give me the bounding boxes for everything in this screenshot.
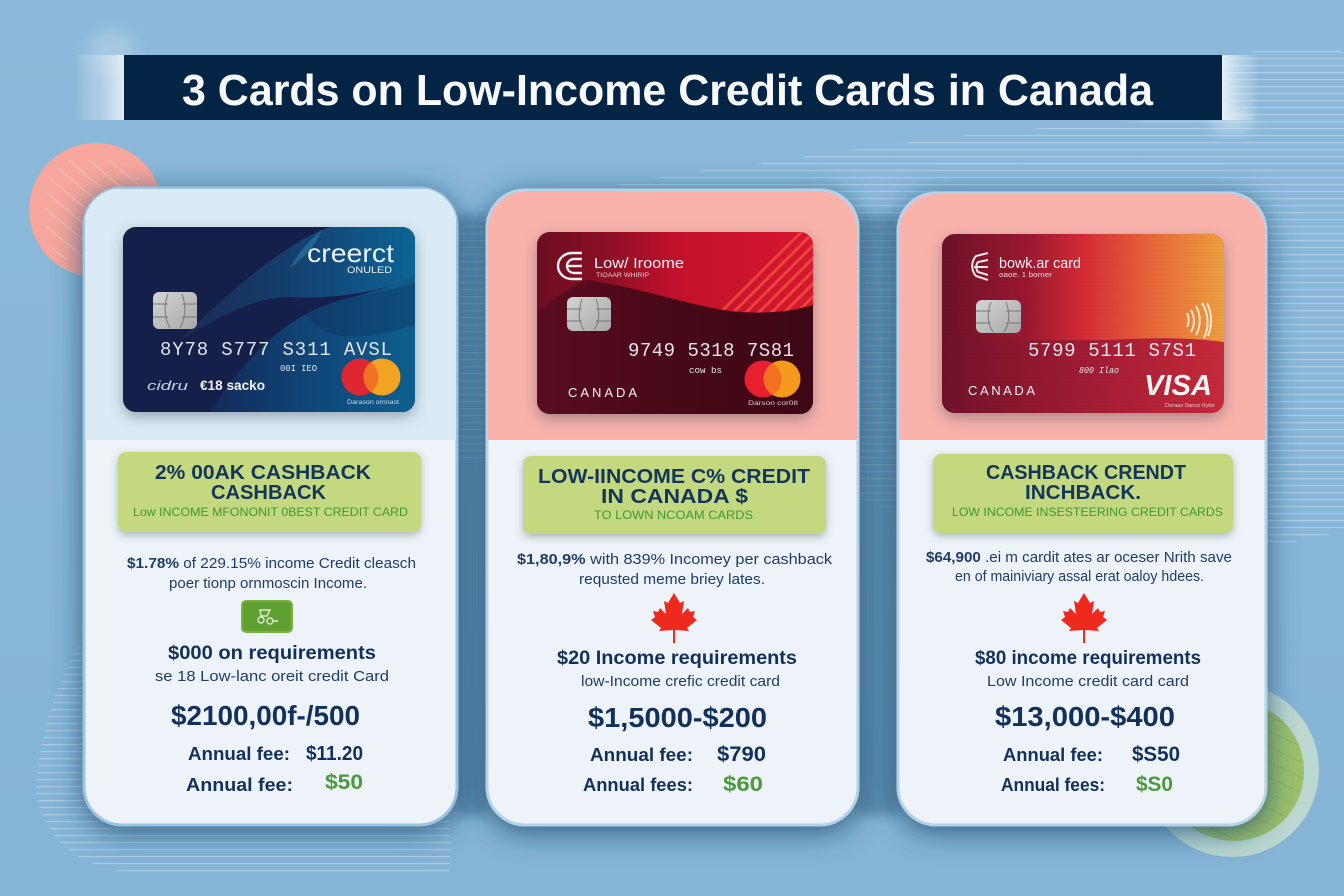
card number: 5799 5111 S7S1	[1028, 340, 1196, 362]
requirements 1: se 18 Low-lanc oreit credit Card	[155, 668, 389, 685]
credit card 1: 00I IEO	[280, 364, 317, 374]
requirements 3	[975, 648, 1201, 690]
green box 1: Low INCOME MFONONIT 0BEST CREDIT CARD	[133, 505, 408, 519]
requirements 2	[557, 648, 797, 690]
fees 3	[1001, 743, 1180, 796]
chip	[976, 300, 1021, 333]
gap shading between panels	[455, 215, 900, 815]
panel header 2	[488, 191, 857, 440]
green box 3	[933, 454, 1233, 533]
requirements 3: Low Income credit card card	[987, 673, 1189, 690]
decorative green circle	[1145, 683, 1319, 857]
panel header 3	[899, 194, 1265, 440]
description 1: poer tionp ornmoscin Income.	[169, 575, 367, 592]
fees 1: Annual fee:	[188, 744, 290, 764]
credit limit 1: $2100,00f-/500	[171, 700, 360, 731]
green box 2	[523, 456, 826, 534]
description 3	[926, 549, 1232, 585]
fees 2: $60	[723, 773, 763, 796]
chip	[153, 292, 197, 329]
fees 2: Annual fee:	[590, 745, 693, 765]
mastercard logo	[744, 360, 800, 398]
icon: green cash note	[242, 601, 292, 632]
fees 2	[583, 743, 766, 796]
credit card 3: 800 Ilao	[1079, 366, 1119, 376]
credit card 2: Darson cor08	[748, 401, 799, 407]
green box 2: IN CANADA $	[601, 486, 748, 508]
background stripes: upper right	[450, 48, 1344, 545]
card number: 9749 5318 7S81	[628, 340, 794, 362]
credit card 1	[123, 227, 415, 412]
credit card 2: TIOAAR WHIRIP	[596, 273, 649, 279]
green box 3: LOW INCOME INSESTEERING CREDIT CARDS	[952, 505, 1223, 519]
panel header 1	[85, 189, 456, 440]
fees 3: Annual fees:	[1001, 775, 1105, 795]
requirements 3: $80 income requirements	[975, 648, 1201, 669]
credit card 3	[942, 234, 1224, 413]
green box 1: 2% 00AK CASHBACK	[155, 462, 372, 484]
fees 1	[186, 743, 363, 795]
brand: creerct	[307, 238, 395, 268]
panel: card 3	[898, 193, 1266, 825]
panel: card 2	[487, 190, 858, 825]
green box 1	[118, 452, 421, 532]
credit card 3: oaoe. 1 borner	[999, 272, 1053, 279]
description 2	[517, 551, 833, 588]
title glow right	[1210, 55, 1258, 132]
green box 3: INCHBACK.	[1025, 482, 1141, 504]
decorative pink circle	[29, 143, 163, 277]
description 3: en of mainiviary assal erat oaloy hdees.	[955, 568, 1204, 585]
fees 3: $S50	[1132, 743, 1180, 766]
description 1	[127, 555, 416, 592]
visa logo: VISA	[1144, 370, 1212, 402]
requirements 2: $20 Income requirements	[557, 648, 797, 669]
card number: 8Y78 S777 S311 AVSL	[160, 339, 392, 361]
green box 1: CASHBACK	[211, 482, 327, 504]
fees 3: $S0	[1136, 773, 1173, 796]
green box 2: LOW-IINCOME C% CREDIT	[538, 466, 810, 488]
fees 2: $790	[717, 743, 766, 766]
fees 1: $11.20	[306, 743, 363, 765]
credit card 3: Dsraas 0ance 0ytor	[1165, 403, 1215, 409]
credit card 1: Darason omnast	[347, 400, 399, 406]
logo	[558, 253, 582, 279]
icon: maple leaf	[651, 593, 697, 643]
credit card 2	[537, 232, 813, 414]
credit card 1: ONULED	[347, 265, 393, 275]
brand: Low/ Iroome	[594, 255, 684, 272]
credit limit 2: $1,5000-$200	[588, 702, 767, 733]
description 1: $1.78% of 229.15% income Credit cleasch	[127, 555, 416, 572]
requirements 2: low-Income crefic credit card	[581, 673, 780, 690]
fees 3: Annual fee:	[1003, 745, 1103, 765]
credit card 2: cow bs	[689, 366, 722, 376]
green box 2: TO LOWN NCOAM CARDS	[594, 508, 753, 522]
contactless icon	[1187, 303, 1211, 338]
chip	[567, 297, 611, 331]
fees 1: Annual fee:	[186, 775, 293, 795]
requirements 1	[155, 643, 389, 685]
description 3: $64,900 .ei m cardit ates ar oceser Nrith save	[926, 549, 1232, 566]
icon: maple leaf	[1061, 593, 1107, 643]
requirements 1: $000 on requirements	[168, 643, 376, 664]
title glow left	[74, 30, 136, 120]
title bar	[124, 55, 1222, 120]
credit limit 3: $13,000-$400	[995, 701, 1175, 732]
title: 3 Cards on Low-Income Credit Cards in Canada	[182, 66, 1154, 115]
credit card 1: cidru	[147, 378, 188, 393]
description 2: $1,80,9% with 839% Incomey per cashback	[517, 551, 833, 568]
credit card 3: CANADA	[968, 383, 1035, 398]
fees 1: $50	[325, 771, 363, 794]
credit card 1: €18 sacko	[200, 377, 265, 393]
green box 3: CASHBACK CRENDT	[986, 462, 1186, 484]
logo	[972, 253, 988, 280]
panel: card 1	[84, 188, 457, 825]
background stripes: lower left	[36, 640, 450, 873]
description 2: requsted meme briey lates.	[579, 571, 765, 588]
mastercard logo	[342, 358, 400, 396]
brand: bowk.ar card	[999, 255, 1081, 272]
credit card 2: CANADA	[568, 385, 637, 400]
fees 2: Annual fees:	[583, 775, 693, 795]
